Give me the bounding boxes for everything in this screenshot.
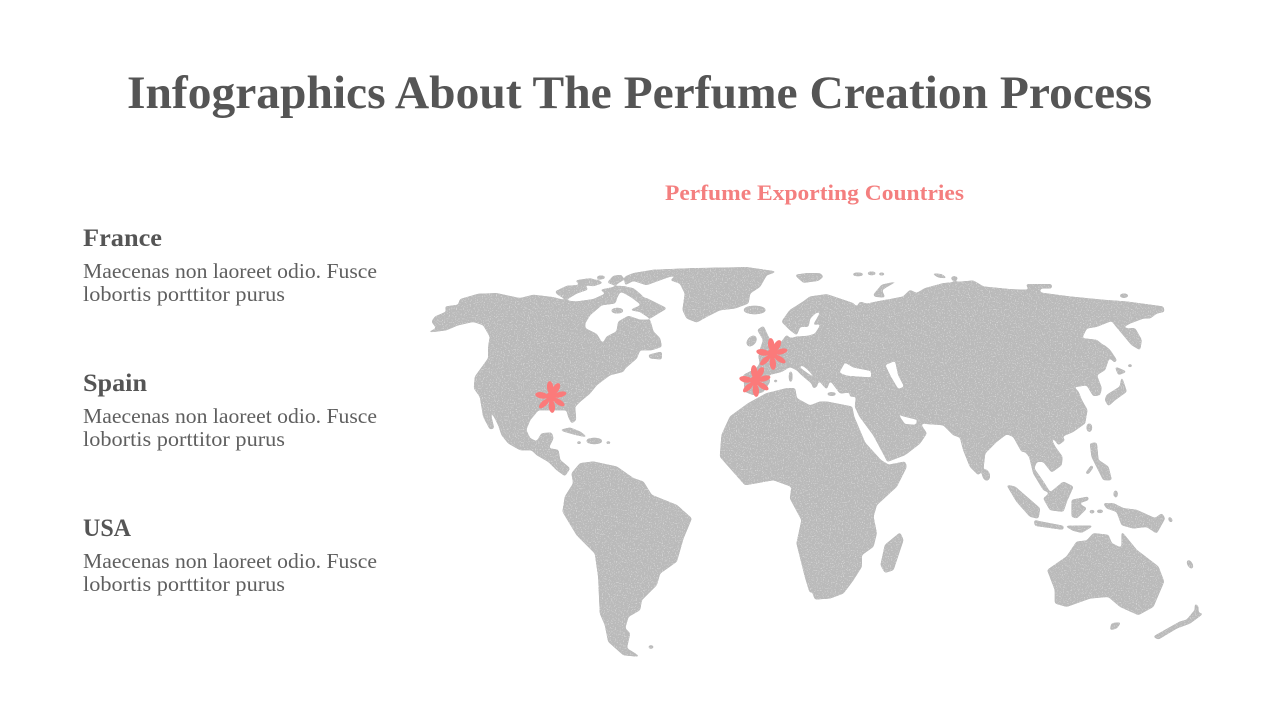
text block: USA: USA — [83, 515, 131, 542]
text block: Spain — [83, 370, 377, 451]
text block: France — [83, 225, 377, 306]
map: landmasses — [427, 267, 1203, 657]
text block: USA: lobortis porttitor purus — [83, 572, 285, 596]
text block: Spain: Spain — [83, 370, 147, 397]
marker: Spain — [737, 364, 772, 398]
panel: country list — [83, 225, 377, 596]
text block: USA — [83, 515, 377, 596]
text block: France: lobortis porttitor purus — [83, 282, 285, 306]
text block: USA: Maecenas non laoreet odio. Fusce — [83, 549, 377, 573]
text block: Spain: Maecenas non laoreet odio. Fusce — [83, 404, 377, 428]
title: Infographics About The Perfume Creation Process — [127, 67, 1152, 119]
text block: Spain: lobortis porttitor purus — [83, 427, 285, 451]
map: inland seas — [839, 361, 917, 425]
map: Eurasia, Africa and Oceania — [720, 272, 1203, 639]
map: Americas and Greenland — [427, 267, 792, 657]
marker: USA — [533, 380, 568, 414]
map heading: Perfume Exporting Countries — [665, 180, 964, 205]
world map — [427, 267, 1203, 657]
marker: France — [754, 337, 789, 371]
text block: France: Maecenas non laoreet odio. Fusce — [83, 259, 377, 283]
text block: France: France — [83, 225, 162, 252]
